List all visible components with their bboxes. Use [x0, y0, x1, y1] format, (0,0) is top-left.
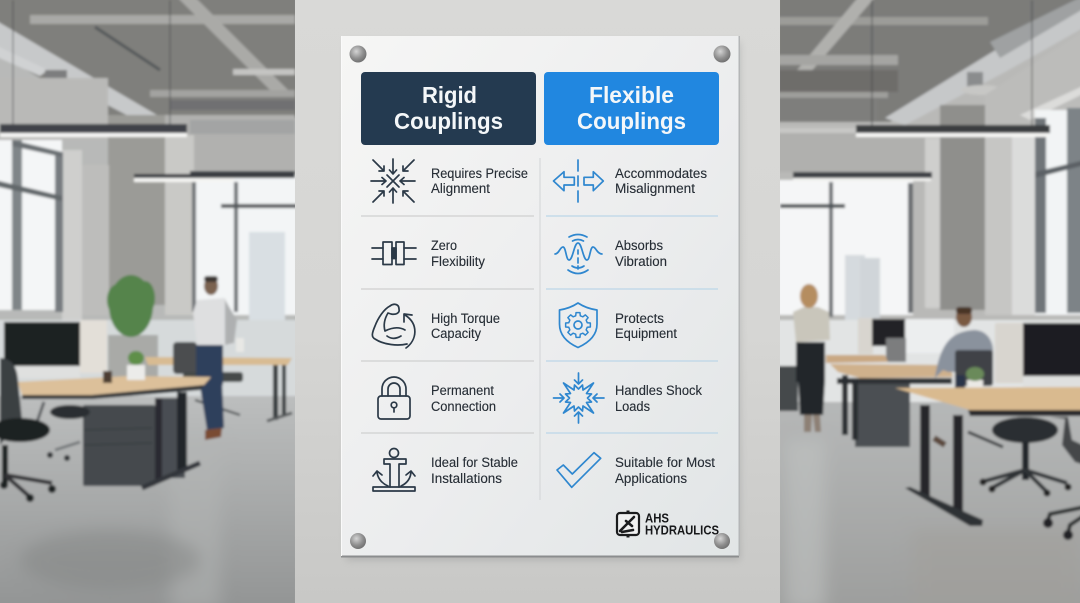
sign panel — [341, 36, 740, 558]
text — [615, 238, 667, 269]
icon: shock burst with arrows — [554, 373, 604, 423]
icon: shield with gear — [560, 303, 597, 348]
text: Accommodates — [615, 166, 707, 181]
screw: top right — [714, 46, 730, 62]
person — [196, 345, 223, 385]
text: Flexibility — [431, 254, 485, 269]
man — [935, 330, 993, 378]
rear desk — [145, 357, 292, 365]
text — [615, 311, 677, 341]
text: Connection — [431, 399, 496, 414]
chair behind — [50, 405, 90, 419]
rear monitors — [858, 318, 873, 354]
rear chair — [173, 342, 197, 374]
screw: bottom left — [350, 533, 366, 549]
text — [431, 311, 500, 341]
logo: AHS Hydraulics: HYDRAULICS — [645, 523, 719, 537]
text — [431, 238, 485, 269]
corner chair — [1047, 507, 1080, 533]
drawers — [83, 405, 155, 486]
text — [431, 166, 528, 196]
text — [431, 455, 518, 486]
icon: vibration wave — [555, 234, 602, 274]
icon: opposing arrows — [554, 160, 603, 202]
pot plant — [127, 365, 145, 380]
header: rigid couplings — [361, 72, 536, 145]
header: rigid couplings: Rigid — [422, 82, 477, 108]
text: Absorbs — [615, 238, 663, 253]
logo mark — [617, 510, 639, 538]
legs — [920, 405, 930, 497]
text: Applications — [615, 471, 687, 486]
row: handles shock loads — [554, 373, 702, 423]
icon: flexed arm with torque arrow — [372, 304, 415, 348]
row: requires precise alignment — [371, 159, 528, 203]
text: Loads — [615, 399, 650, 414]
text: Suitable for Most — [615, 455, 715, 470]
text — [431, 383, 496, 414]
logo: AHS Hydraulics: AHS — [645, 512, 669, 526]
monitor — [4, 322, 80, 366]
icon: check mark — [557, 453, 601, 487]
floor — [0, 395, 297, 603]
logo: AHS Hydraulics — [617, 510, 719, 538]
text: Permanent — [431, 383, 494, 398]
icon: rigid coupling — [372, 242, 416, 264]
chair front — [0, 358, 22, 445]
header: flexible couplings: Couplings — [577, 108, 686, 134]
icon: padlock — [378, 377, 410, 419]
header: flexible couplings: Flexible — [589, 82, 674, 108]
text: Protects — [615, 311, 664, 326]
header: rigid couplings: Couplings — [394, 108, 503, 134]
text: Installations — [431, 471, 502, 486]
row: permanent connection — [378, 377, 496, 419]
front monitor — [995, 323, 1025, 383]
screw: bottom right — [714, 533, 730, 549]
rear wall base — [0, 320, 297, 396]
text: Zero — [431, 238, 457, 253]
woman — [778, 366, 798, 411]
row: high torque capacity — [372, 304, 500, 348]
text — [615, 383, 702, 414]
text: Requires Precise — [431, 166, 528, 181]
icon: anchored base with arrows — [373, 448, 415, 491]
chair — [992, 417, 1058, 443]
background: right office — [778, 0, 1080, 603]
icon: converging arrows — [371, 159, 415, 203]
text: Misalignment — [615, 181, 695, 196]
front desk — [895, 387, 1080, 410]
text: High Torque — [431, 311, 500, 326]
text: Alignment — [431, 181, 490, 196]
text — [615, 166, 707, 196]
row: zero flexibility — [372, 238, 485, 269]
text: Vibration — [615, 254, 667, 269]
pot — [967, 380, 983, 394]
text: Handles Shock — [615, 383, 702, 398]
text: Equipment — [615, 326, 677, 341]
background: left office — [0, 0, 297, 603]
screw: top left — [350, 46, 366, 62]
floor — [778, 400, 1080, 603]
row: protects equipment — [560, 303, 677, 348]
row: accommodates misalignment — [554, 160, 707, 202]
text: Capacity — [431, 326, 481, 341]
rear cabinet — [855, 384, 910, 447]
row: ideal for stable installations — [373, 448, 518, 491]
desk front — [18, 376, 211, 395]
row: absorbs vibration — [555, 234, 667, 274]
header: flexible couplings — [544, 72, 719, 145]
row: suitable for most applications — [557, 453, 715, 487]
plant — [107, 275, 155, 337]
text — [615, 455, 715, 486]
wall behind sign — [295, 0, 780, 603]
text: Ideal for Stable — [431, 455, 518, 470]
